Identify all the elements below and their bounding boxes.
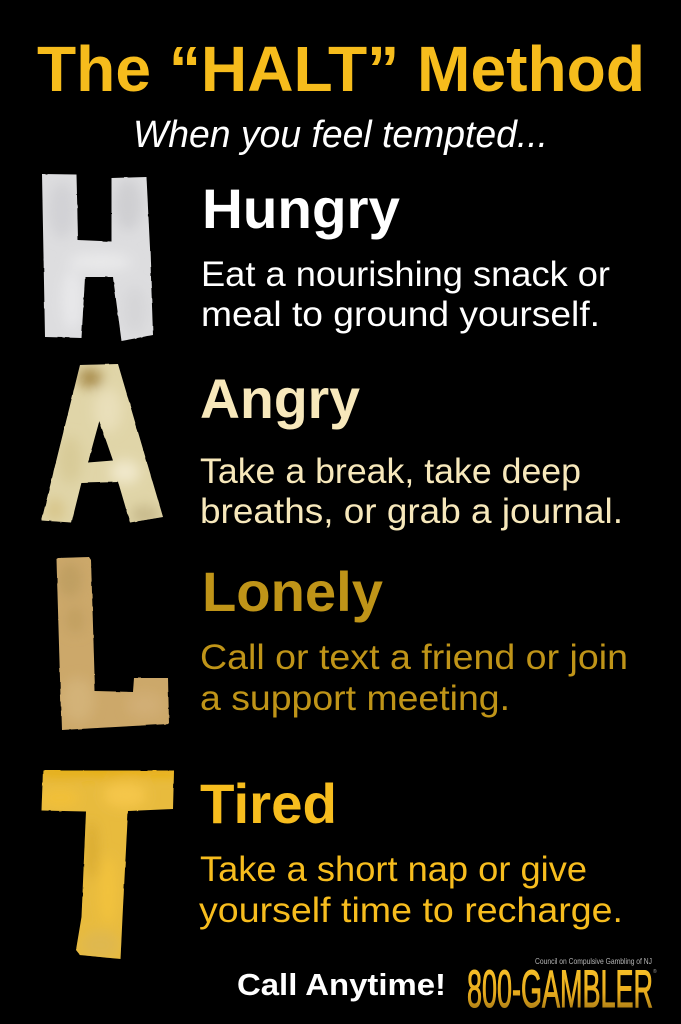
- description: angry: [200, 451, 623, 531]
- icon: watercolor letter T: [42, 770, 174, 959]
- registered mark: ®: [653, 968, 657, 975]
- icon: watercolor letter H: [42, 174, 154, 341]
- panel: angry: [200, 367, 623, 531]
- heading: Lonely: Lonely: [202, 560, 383, 623]
- description: lonely: Call or text a friend or join: [200, 637, 628, 677]
- panel: lonely: [200, 560, 628, 718]
- logo tagline: Council on Compulsive Gambling of NJ: [535, 956, 652, 966]
- description: tired: Take a short nap or give: [200, 849, 587, 889]
- icon: watercolor letter A: [41, 364, 163, 522]
- heading: Tired: Tired: [200, 772, 337, 835]
- description: angry: breaths, or grab a journal.: [200, 491, 623, 531]
- icon: watercolor letter L: [56, 557, 170, 730]
- panel: tired: [199, 772, 623, 930]
- description: lonely: [200, 637, 628, 718]
- description: lonely: a support meeting.: [200, 678, 510, 718]
- logo: 800-GAMBLER: [467, 956, 657, 1019]
- description: hungry: [201, 254, 610, 334]
- panel: hungry: [201, 177, 610, 334]
- heading: Angry: Angry: [200, 367, 360, 430]
- heading: Hungry: Hungry: [202, 177, 400, 240]
- description: tired: yourself time to recharge.: [199, 890, 623, 930]
- title: The “HALT” Method: [37, 33, 645, 105]
- description: hungry: meal to ground yourself.: [201, 294, 600, 334]
- description: tired: [199, 849, 623, 930]
- subtitle: When you feel tempted...: [133, 114, 548, 156]
- call to action: Call Anytime!: [237, 967, 446, 1002]
- description: hungry: Eat a nourishing snack or: [201, 254, 610, 294]
- description: angry: Take a break, take deep: [200, 451, 581, 491]
